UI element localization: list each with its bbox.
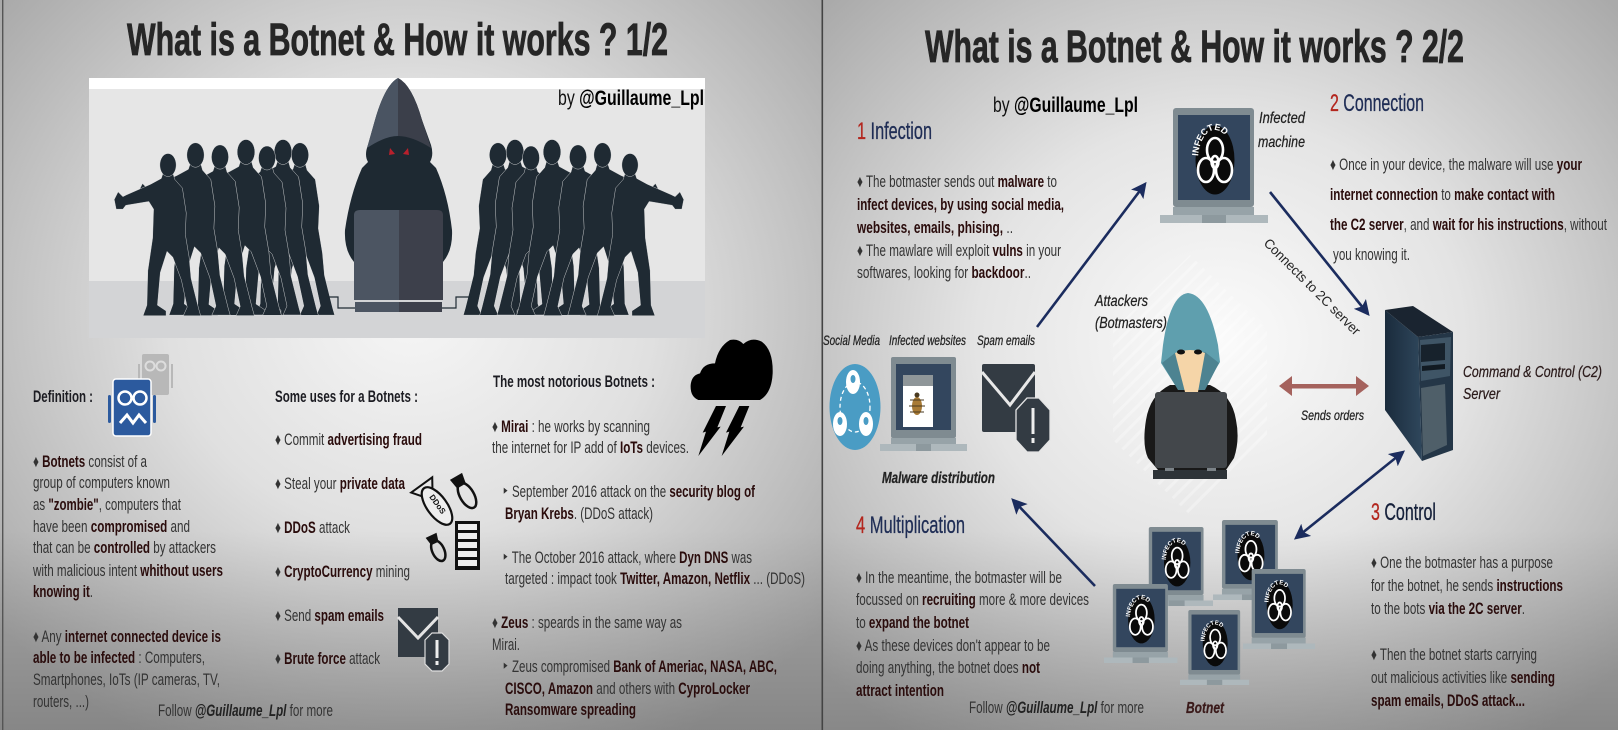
zombies: left group <box>114 140 335 316</box>
text: uses for a botnet: ♦ Steal your private data <box>275 474 405 493</box>
text: definition: Smartphones, IoTs (IP cameras, TV, <box>33 670 220 689</box>
text: definition: group of computers known <box>33 473 170 492</box>
section: 1 infection: ♦ The botmaster sends out malware to <box>857 172 1057 191</box>
text: notorious botnets: The most notorious Botnets : <box>493 372 655 391</box>
text: notorious botnets: the internet for IP add of IoTs devices. <box>492 438 689 457</box>
text: uses for a botnet <box>275 387 422 668</box>
labels: malware sources <box>823 332 1035 348</box>
icon: infected machine laptop: INFECTED <box>1192 124 1228 156</box>
text: notorious botnets: Ransomware spreading <box>505 700 636 719</box>
labels: malware sources: Infected websites <box>889 332 966 348</box>
section: 3 control: spam emails, DDoS attack... <box>1371 691 1525 710</box>
section: 4 multiplication: 4 Multiplication <box>856 512 965 539</box>
section: 4 multiplication: focussed on recruiting more & more devices <box>856 590 1089 609</box>
text: definition: ♦ Botnets consist of a <box>33 452 147 471</box>
text: notorious botnets: CISCO, Amazon and others with CyproLocker <box>505 679 750 698</box>
text: notorious botnets: ‣ The October 2016 attack, where Dyn DNS was <box>502 548 752 567</box>
arrow: malware to infected machine <box>1037 184 1145 327</box>
icon: ddos bombs and server <box>411 473 480 570</box>
footer: follow right: Follow @Guillaume_Lpl for more <box>969 698 1144 717</box>
section: 4 multiplication: ♦ As these devices don't appear to be <box>856 636 1050 655</box>
section: 1 infection: 1 Infection <box>857 118 932 145</box>
text: definition <box>32 387 223 711</box>
icon: ddos bombs and server: DDoS <box>427 493 448 516</box>
section: 3 control: for the botnet, he sends instructions <box>1371 576 1563 595</box>
background: right panel <box>822 0 1618 730</box>
icon: infected machine laptop <box>1160 108 1268 223</box>
group: botnet laptops: INFECTED <box>1162 538 1186 560</box>
text: notorious botnets: Mirai. <box>492 635 520 654</box>
group: botnet laptops: INFECTED <box>1126 594 1150 617</box>
text: notorious botnets: ♦ Zeus : speards in the same way as <box>492 613 682 632</box>
text: definition: that can be controlled by attackers <box>33 538 216 557</box>
label: sends orders: Sends orders <box>1301 407 1364 423</box>
icon: infected website laptop <box>880 357 967 451</box>
text: uses for a botnet: ♦ CryptoCurrency mining <box>275 562 410 581</box>
section: 2 connection: internet connection to make contact with <box>1330 185 1555 204</box>
text: notorious botnets: ‣ Zeus compromised Bank of Ameriac, NASA, ABC, <box>502 657 777 676</box>
group: botnet laptops: INFECTED <box>1264 580 1288 602</box>
section: 2 connection: you knowing it. <box>1333 245 1410 264</box>
zombies: right group <box>463 140 684 316</box>
section: 3 control: out malicious activities like sending <box>1371 668 1555 687</box>
section: 2 connection: 2 Connection <box>1330 90 1424 117</box>
label: malware distribution: Malware distribution <box>882 470 995 487</box>
section: 1 infection: websites, emails, phising, .. <box>856 218 1013 237</box>
icon: spam email <box>982 364 1050 452</box>
text: definition: routers, ...) <box>33 692 89 711</box>
section: 3 control: ♦ Then the botnet starts carrying <box>1371 645 1537 664</box>
label: attackers: Attackers <box>1094 293 1148 310</box>
text: uses for a botnet: ♦ Send spam emails <box>275 606 384 625</box>
label: attackers <box>1094 293 1167 332</box>
text: definition: ♦ Any internet connected device is <box>33 627 221 646</box>
hatch backdrop behind attacker <box>1113 255 1267 515</box>
labels: malware sources: Social Media <box>823 332 880 348</box>
label: connects to 2C server: Connects to 2C server <box>1261 236 1364 338</box>
text: notorious botnets: targeted : impact took Twitter, Amazon, Netflix ... (DDoS) <box>505 569 805 588</box>
label: botnet: Botnet <box>1186 700 1225 717</box>
label: attackers: (Botmasters) <box>1095 315 1167 332</box>
panel: hacker and zombies illustration <box>89 78 705 338</box>
section: 4 multiplication <box>856 512 1089 700</box>
section: 4 multiplication: to expand the botnet <box>856 613 969 632</box>
group: botnet laptops: INFECTED <box>1200 620 1224 641</box>
text: definition: as "zombie", computers that <box>33 495 181 514</box>
network wires <box>327 297 472 308</box>
text: definition: with malicious intent whithout users <box>32 561 223 580</box>
text: notorious botnets: ‣ September 2016 attack on the security blog of <box>502 482 755 501</box>
text: notorious botnets <box>492 372 805 719</box>
text: uses for a botnet: Some uses for a Botnets : <box>275 387 418 406</box>
icon: robots <box>108 354 173 436</box>
section: 4 multiplication: doing anything, the botnet does not <box>856 658 1040 677</box>
title: part 1: What is a Botnet & How it works ? 1/2 <box>127 14 668 65</box>
section: 1 infection: ♦ The mawlare will exploit vulns in your <box>857 241 1061 260</box>
section: 3 control: to the bots via the 2C server. <box>1371 599 1525 618</box>
text: definition: have been compromised and <box>33 517 190 536</box>
group: botnet laptops <box>1104 520 1315 685</box>
section: 1 infection: softwares, looking for backdoor.. <box>857 263 1031 282</box>
section: 1 infection: infect devices, by using social media, <box>857 195 1064 214</box>
section: 1 infection <box>856 118 1064 282</box>
arrow: infected machine to c2 server <box>1270 192 1368 314</box>
text: notorious botnets: Bryan Krebs. (DDoS attack) <box>505 504 653 523</box>
footer: follow left: Follow @Guillaume_Lpl for more <box>158 701 333 720</box>
section: 4 multiplication: attract intention <box>856 681 944 700</box>
text: definition: able to be infected : Computers, <box>33 648 205 667</box>
label: c2 server: Server <box>1463 386 1501 403</box>
hooded hacker <box>345 78 452 312</box>
label: c2 server <box>1463 364 1602 403</box>
icon: c2 server tower <box>1385 306 1453 461</box>
background: left panel <box>0 0 822 730</box>
icon: hooded attacker <box>1144 293 1238 479</box>
icon: social media <box>830 364 880 450</box>
icon: storm cloud <box>691 340 773 456</box>
arrow: server to botnet <box>1296 452 1403 538</box>
section: 2 connection <box>1330 90 1607 264</box>
arrow: sends orders <box>1279 376 1369 396</box>
text: definition: Definition : <box>33 387 93 406</box>
arrow: botnet to multiplication <box>1013 500 1095 586</box>
labels: malware sources: Spam emails <box>977 332 1035 348</box>
section: 4 multiplication: ♦ In the meantime, the botmaster will be <box>856 568 1062 587</box>
text: uses for a botnet: ♦ Commit advertising fraud <box>275 430 422 449</box>
text: definition: knowing it. <box>33 582 93 601</box>
section: 3 control <box>1371 499 1563 710</box>
group: botnet laptops: INFECTED <box>1235 530 1260 554</box>
icon: spam email left <box>398 608 449 671</box>
text: uses for a botnet: ♦ Brute force attack <box>275 649 380 668</box>
section: 3 control: 3 Control <box>1371 499 1436 526</box>
label: infected machine: Infected <box>1259 110 1306 127</box>
text: notorious botnets: ♦ Mirai : he works by scanning <box>492 417 650 436</box>
byline right: by @Guillaume_Lpl <box>993 94 1138 117</box>
text: uses for a botnet: ♦ DDoS attack <box>275 518 350 537</box>
byline: by @Guillaume_Lpl <box>558 87 704 110</box>
label: infected machine <box>1258 110 1306 151</box>
label: infected machine: machine <box>1258 134 1305 151</box>
